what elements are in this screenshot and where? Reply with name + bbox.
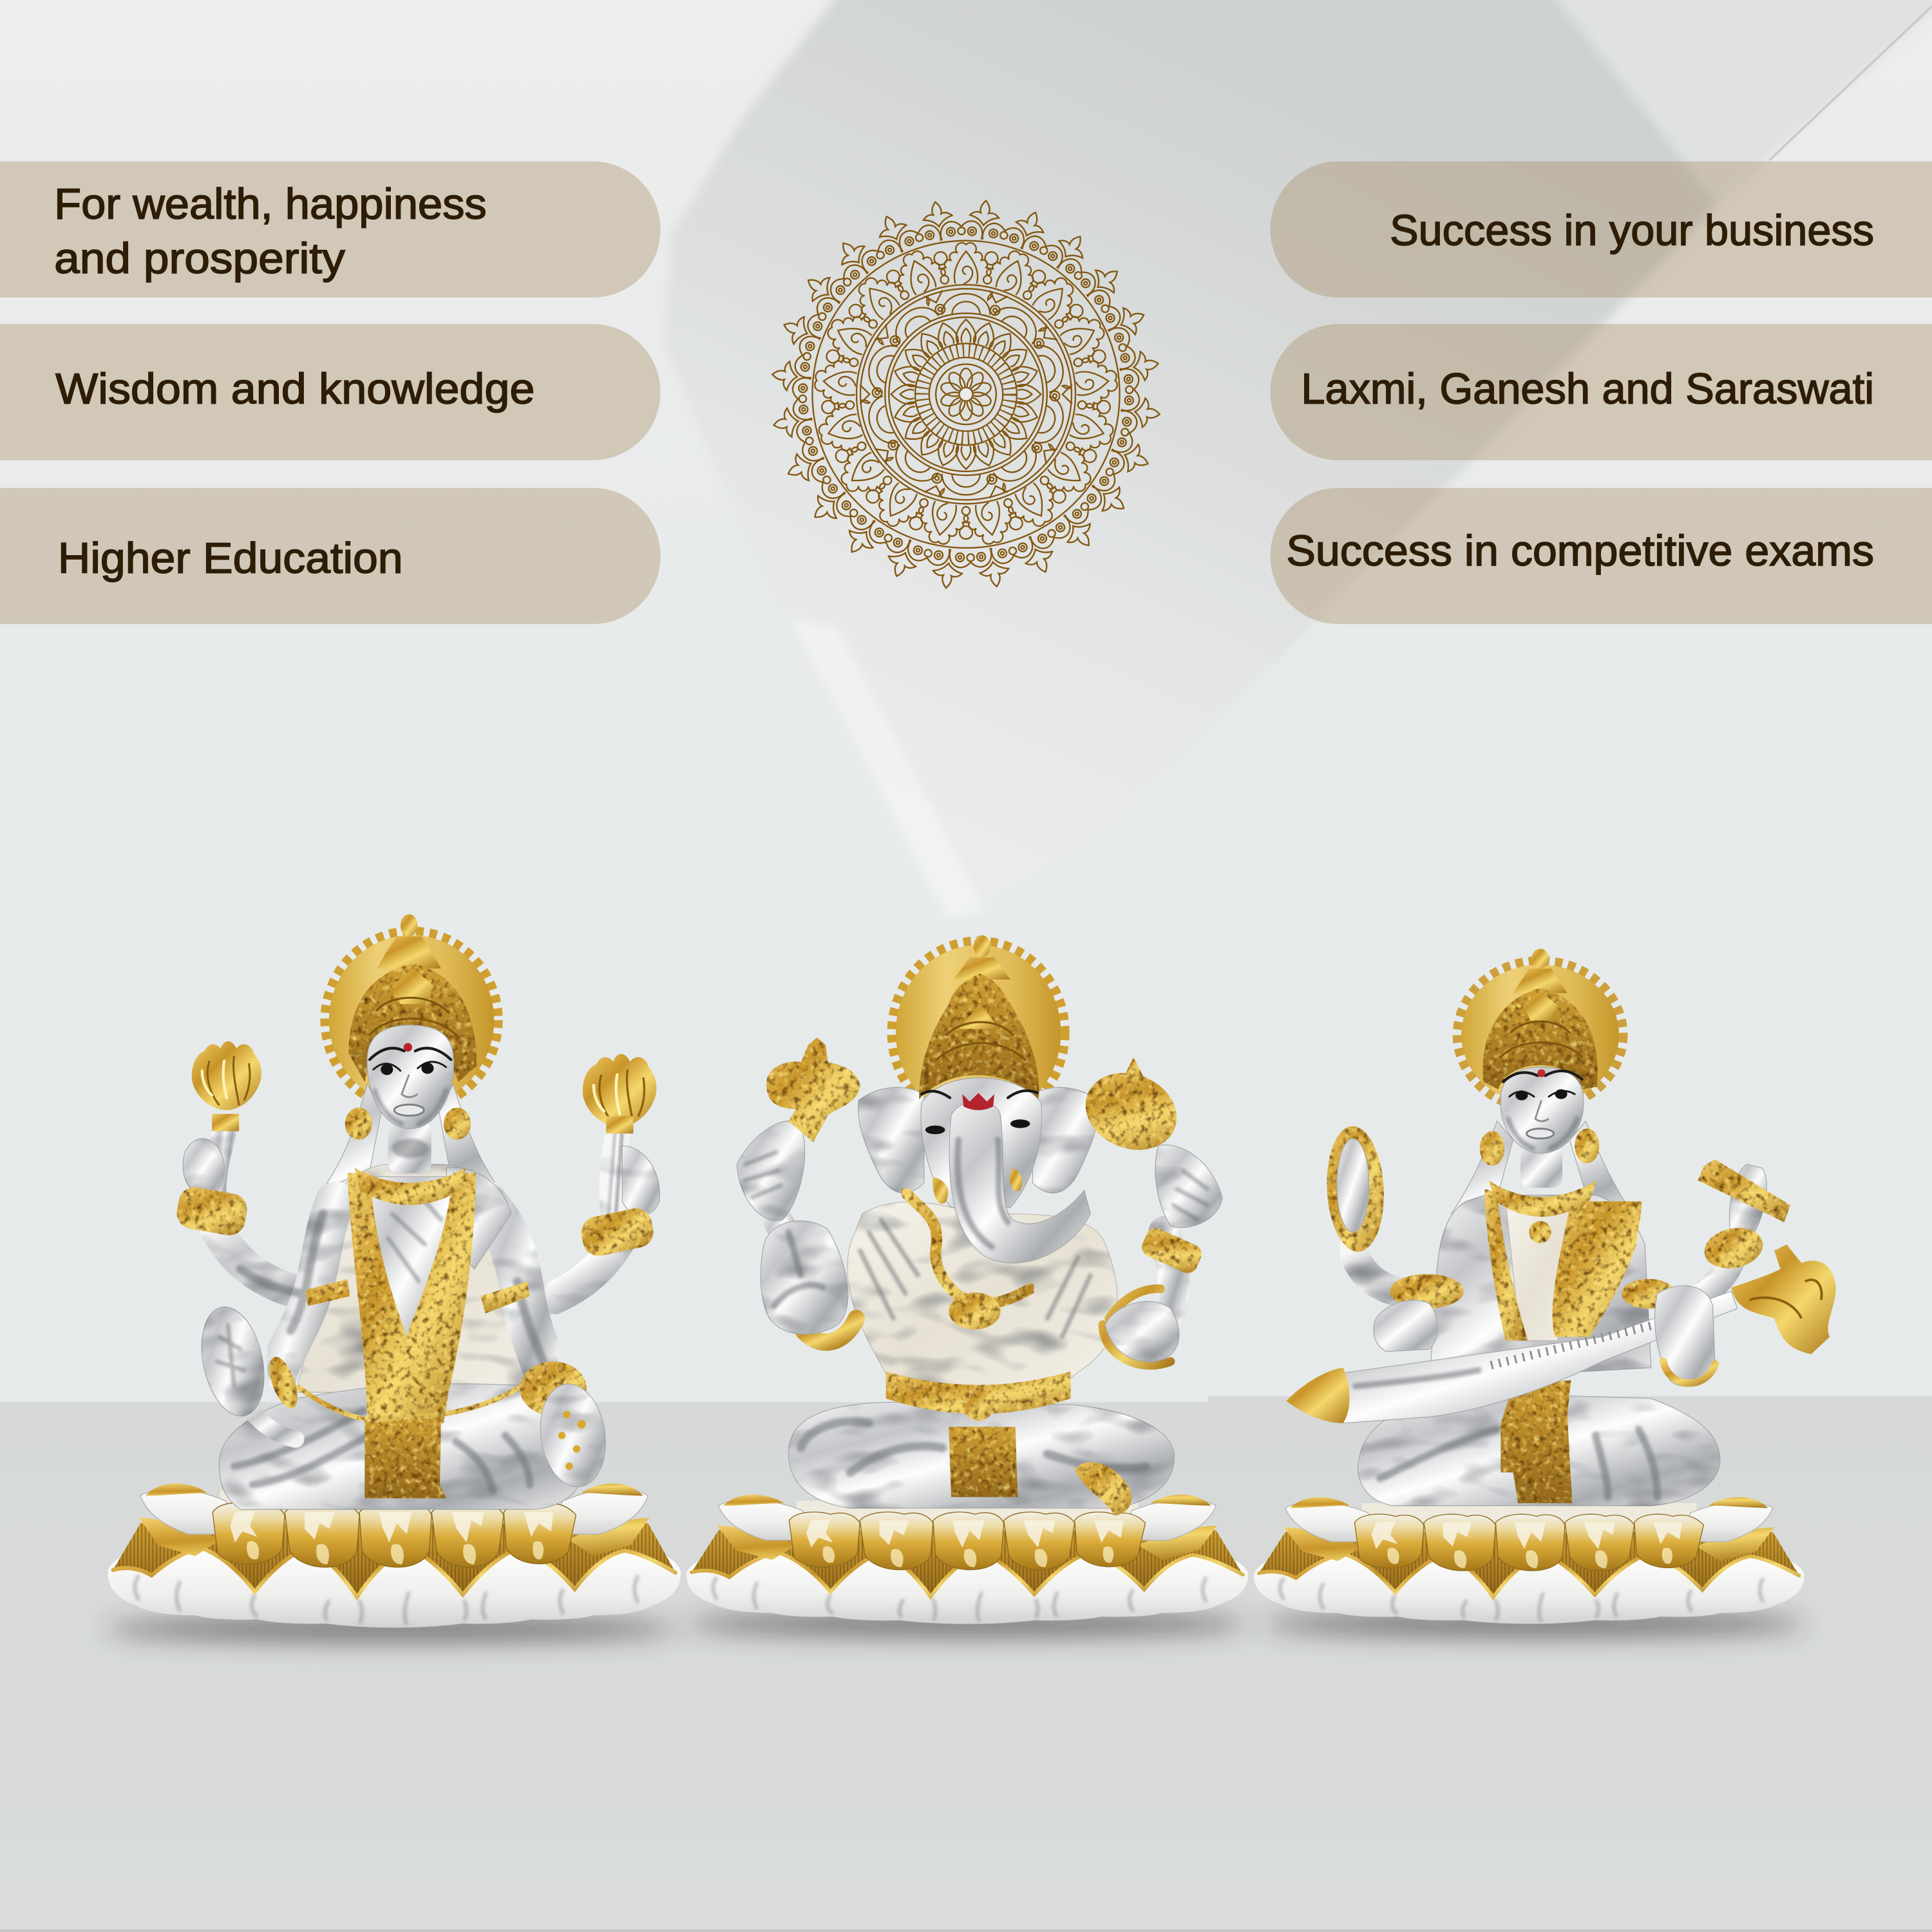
- sari folds: [388, 1201, 441, 1282]
- gold shawl, necklaces and dhoti: [1390, 1180, 1676, 1503]
- shadow: [106, 1616, 677, 1641]
- pill: exams: Success in competitive exams: [1286, 527, 1874, 575]
- back arms: [183, 1124, 659, 1309]
- pill: wisdom: Wisdom and knowledge: [55, 365, 535, 413]
- neck and face: [345, 1025, 471, 1173]
- upper arms and hands: [737, 1121, 1222, 1343]
- pill: education: Higher Education: [58, 535, 403, 583]
- centre sari: [1506, 1201, 1580, 1341]
- pill: business: Success in your business: [1390, 207, 1874, 255]
- veena: [1286, 1244, 1836, 1423]
- panel: left benefit pills: [0, 162, 661, 624]
- leg reflections: [801, 1421, 1146, 1472]
- centre sari: [367, 1177, 462, 1349]
- pill: wealth: [0, 162, 661, 298]
- back arms: [1353, 1164, 1766, 1309]
- pill: deities: Laxmi, Ganesh and Saraswati: [1301, 365, 1874, 413]
- statue: Saraswati: [1254, 949, 1836, 1636]
- ears: [858, 1087, 1099, 1193]
- halo: [895, 944, 1062, 1121]
- front hands: [761, 1221, 1179, 1365]
- pill: wealth: and prosperity: [54, 234, 345, 283]
- mala hand, book and bangle: [1324, 1125, 1790, 1274]
- hair: [1452, 1121, 1633, 1214]
- belly: [848, 1202, 1117, 1386]
- background wall: [0, 0, 1932, 1405]
- crown: [1483, 949, 1598, 1089]
- bottom edge: [0, 1929, 1932, 1932]
- crossed legs: [219, 1384, 589, 1510]
- crown: [919, 935, 1039, 1099]
- halo: [1460, 963, 1620, 1106]
- hair: [323, 1084, 499, 1189]
- pill: deities: [1271, 324, 1932, 460]
- pill: business: [1271, 162, 1932, 298]
- crossed legs: [788, 1402, 1175, 1508]
- torso: [1429, 1195, 1651, 1380]
- background diagonal fold line: [1769, 6, 1932, 160]
- head and trunk: [921, 1078, 1090, 1263]
- background facet: central diamond: [665, 0, 1719, 918]
- arm reflections: [240, 1214, 545, 1365]
- statue: Ganesh: [687, 935, 1248, 1636]
- right hand on veena: [1655, 1285, 1715, 1387]
- statue: Laxmi: [106, 914, 681, 1641]
- necklace and pendant: [905, 1193, 1030, 1329]
- pill: exams: [1271, 488, 1932, 624]
- icon: gold mandala: [766, 194, 1166, 594]
- leg folds: [1380, 1429, 1657, 1497]
- background facet: upper right: [1528, 0, 1932, 204]
- background light beam: [788, 616, 986, 918]
- leg reflections: [234, 1411, 530, 1491]
- belly folds: [860, 1220, 1090, 1337]
- palms and bracelets: [193, 1301, 612, 1491]
- hand fingers: [744, 1152, 1208, 1220]
- floor: [0, 1396, 1932, 1932]
- panel: right benefit pills: [1271, 162, 1932, 624]
- crossed legs: [1358, 1392, 1720, 1506]
- gold belt, dhoti and tassel: [886, 1371, 1132, 1515]
- shadow: [687, 1612, 1248, 1636]
- shadow: [1263, 1612, 1805, 1636]
- left hand on gourd: [1374, 1300, 1437, 1352]
- lotus base: [1254, 1497, 1804, 1624]
- neck and face: [1480, 1067, 1599, 1188]
- hand attributes: conch and discus: [766, 1037, 1205, 1276]
- lotus base: [687, 1495, 1248, 1624]
- arms and shoulders: [276, 1168, 549, 1380]
- pill: wisdom: [0, 324, 661, 460]
- lotus buds and bangles: [175, 1041, 656, 1259]
- crown: [348, 914, 477, 1082]
- pill: wealth: For wealth, happiness: [54, 180, 487, 229]
- torso: [296, 1164, 540, 1392]
- pill: education: [0, 488, 661, 624]
- gold necklaces and dhoti: [298, 1168, 530, 1499]
- halo: [328, 934, 495, 1106]
- lotus base: [108, 1484, 681, 1627]
